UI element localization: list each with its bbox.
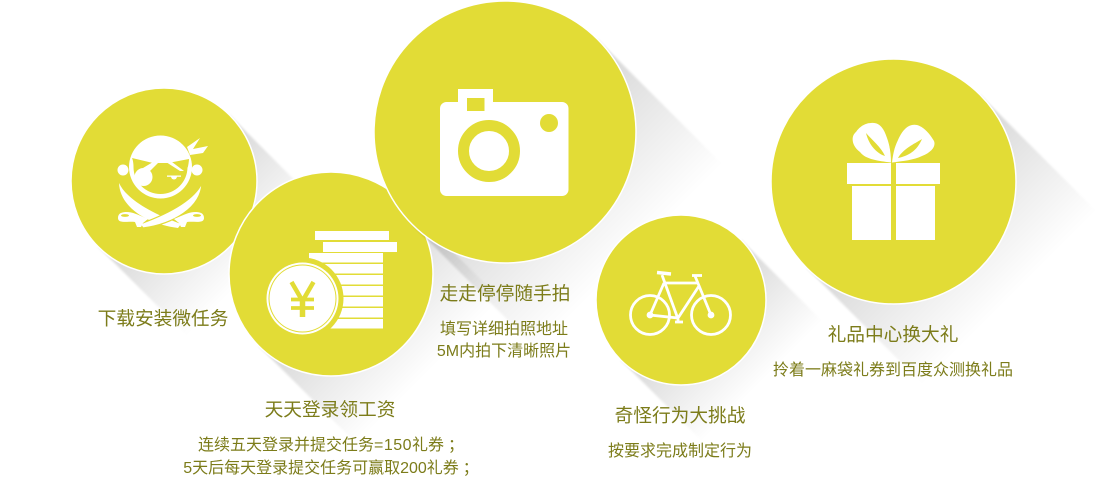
icon: coin stack (262, 231, 397, 340)
text block: daily login rules: 5天后每天登录提交任务可赢取200礼券； (183, 460, 479, 477)
text block: photo rules: 填写详细拍照地址 (440, 321, 568, 338)
icon: pirate (118, 136, 208, 228)
text block: daily login rules (183, 436, 479, 477)
heading: challenge: 奇怪行为大挑战 (615, 405, 745, 426)
circle (374, 1, 636, 263)
circle (71, 88, 257, 274)
text block: daily login rules: 连续五天登录并提交任务=150礼券； (198, 437, 464, 454)
icon: gift (847, 123, 940, 240)
text block: gift rules: 拎着一麻袋礼券到百度众测换礼品 (773, 362, 1013, 379)
text block: challenge rules: 按要求完成制定行为 (608, 443, 752, 460)
heading: gifts: 礼品中心换大礼 (828, 324, 958, 345)
circle (596, 215, 766, 385)
text block: photo rules: 5M内拍下清晰照片 (437, 343, 571, 360)
long shadow (98, 115, 319, 336)
long shadow (621, 240, 822, 441)
icon: camera (440, 89, 568, 196)
long shadow (807, 95, 1097, 385)
panel: bicycle circle (596, 215, 822, 441)
text block: photo rules (437, 320, 571, 360)
long shadow (259, 202, 501, 444)
panel: pirate circle (71, 88, 319, 336)
icon: bicycle (630, 272, 730, 334)
heading: daily login: 天天登录领工资 (265, 399, 395, 420)
panel: gift circle (771, 59, 1097, 385)
heading: download task: 下载安装微任务 (98, 308, 228, 329)
circle (771, 59, 1016, 304)
panel: coins circle (229, 172, 501, 444)
long shadow (412, 39, 723, 350)
panel: camera circle (374, 1, 723, 350)
heading: photo task: 走走停停随手拍 (440, 283, 570, 304)
circle (229, 172, 433, 376)
